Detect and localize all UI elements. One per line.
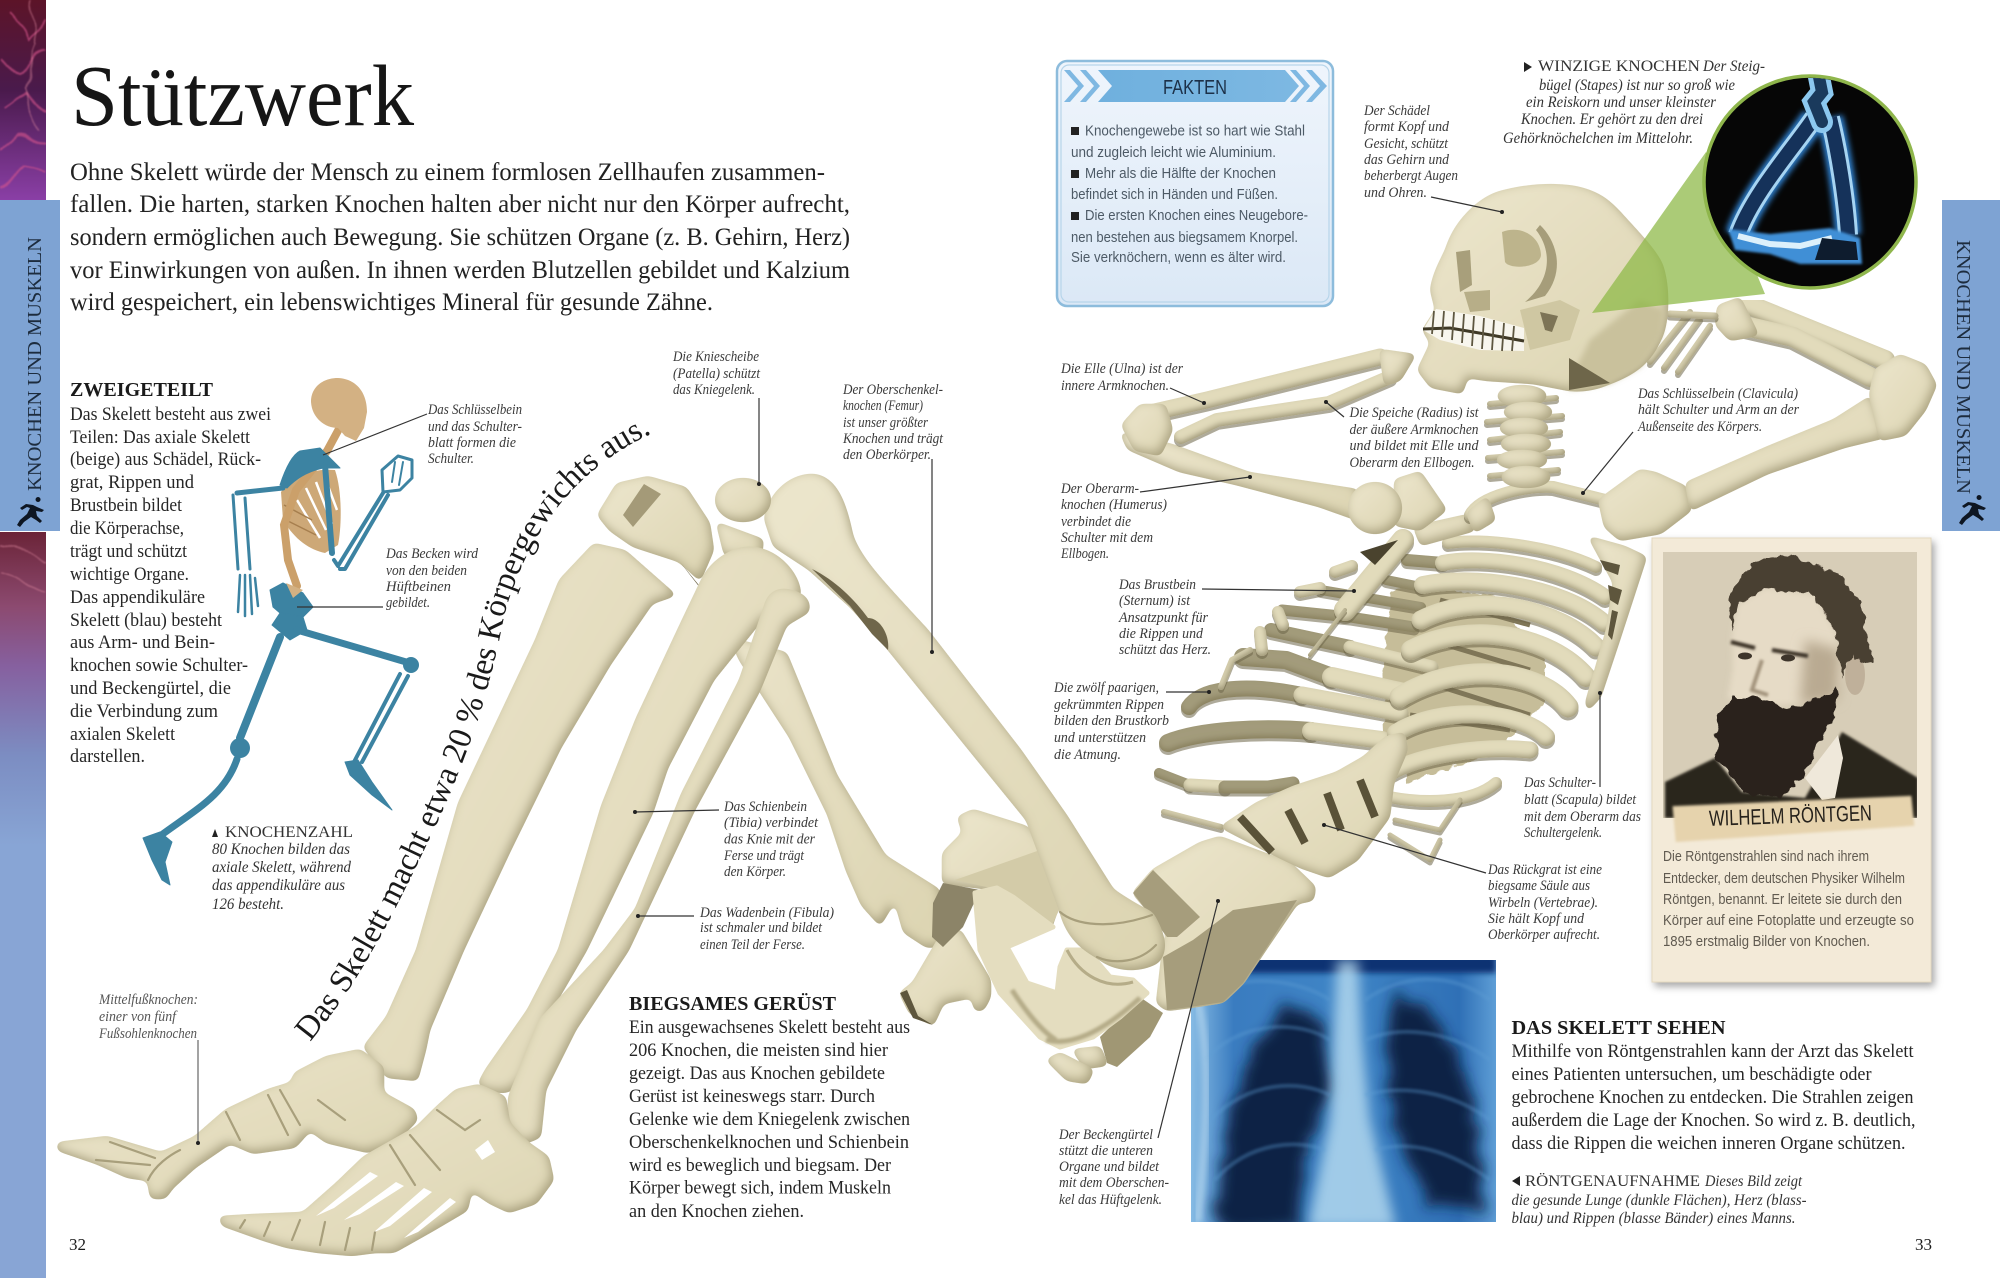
left tab label: KNOCHEN UND MUSKELN <box>24 237 46 491</box>
callout: Rippen <box>1053 680 1211 763</box>
portrait: ear <box>1845 655 1865 695</box>
callout: Schienbein: Ferse und trägt <box>723 848 805 864</box>
name label <box>1672 796 1915 842</box>
callout: Mittelfußknochen: einer von fünf <box>99 1009 178 1025</box>
illustration: running skeleton (axial beige, appendicular blue) <box>143 378 419 885</box>
callout: Beckengürtel: stützt die unteren <box>1059 1143 1153 1159</box>
panel: Wilhelm Röntgen card <box>1652 538 1931 982</box>
page number 33: 33 <box>1915 1235 1932 1254</box>
callout: Becken <box>297 546 479 611</box>
fibula <box>509 590 809 1143</box>
foot: gaps between metatarsals <box>316 1172 456 1238</box>
callout: Brustbein: Das Brustbein <box>1118 577 1196 593</box>
dark inner rib gaps <box>1405 600 1530 760</box>
rear leg <box>240 637 280 738</box>
back ribs <box>1389 541 1605 860</box>
callout: Schlüsselbein small: Schulter. <box>428 451 474 467</box>
callout: Rippen: bilden den Brustkorb <box>1054 713 1169 729</box>
callout: Elle: innere Armknochen. <box>1061 378 1169 394</box>
body: Das Skelett sehen <box>1512 1042 1916 1154</box>
sacrum <box>1133 837 1315 1010</box>
callout: Schlüsselbein large: Das Schlüsselbein (Clavicula) <box>1637 386 1798 402</box>
chest centre mass <box>1382 583 1546 782</box>
portrait: suit <box>1665 732 1918 818</box>
portrait: face <box>1728 588 1842 705</box>
body: Zweigeteilt: die Verbindung zum <box>70 702 219 722</box>
callout: Schlüsselbein small <box>323 402 522 467</box>
callout: Schienbein <box>633 799 819 880</box>
card text <box>1663 848 1914 950</box>
card text: Körper auf eine Fotoplatte und erzeugte so <box>1663 912 1914 929</box>
body: Biegsames Gerüst: Oberschenkelknochen und Schienbein <box>629 1133 909 1153</box>
cervical spine <box>1487 386 1562 487</box>
sternum <box>1260 515 1475 655</box>
callout: Kniescheibe: Die Kniescheibe <box>672 349 759 365</box>
lower pelvis wing <box>900 930 990 1025</box>
icon: runner right <box>1959 495 1986 525</box>
callout: Schlüsselbein small: und das Schulter- <box>428 419 522 435</box>
heading: Zweigeteilt: ZWEIGETEILT <box>70 379 214 401</box>
callout: Schlüsselbein small: blatt formen die <box>428 435 517 451</box>
callout: Rückgrat: biegsame Säule aus <box>1488 878 1590 894</box>
callout: Mittelfußknochen: Mittelfußknochen: <box>98 992 198 1008</box>
callout: Brustbein: schützt das Herz. <box>1119 642 1211 658</box>
callout: Oberarm: Ellbogen. <box>1060 546 1109 562</box>
callout: Schulterblatt <box>1523 691 1641 841</box>
tibia (right) <box>479 548 800 1092</box>
hip joint <box>272 613 307 640</box>
scapula <box>1586 537 1646 710</box>
facts text: Sie verknöchern, wenn es älter wird. <box>1071 249 1286 266</box>
body: Biegsames Gerüst: Ein ausgewachsenes Skelett besteht aus <box>629 1018 910 1038</box>
callout: Oberarm: verbindet die <box>1061 514 1132 530</box>
callout: Speiche: und bildet mit Elle und <box>1350 438 1479 454</box>
body: Zweigeteilt: Das Skelett besteht aus zwei <box>70 405 271 425</box>
callout: Schädel: beherbergt Augen <box>1364 168 1458 184</box>
body: Biegsames Gerüst: Körper bewegt sich, indem Muskeln <box>629 1178 891 1198</box>
callout: Speiche: Die Speiche (Radius) ist <box>1349 405 1479 421</box>
callout: Elle: Die Elle (Ulna) ist der <box>1060 361 1183 377</box>
callout: Wadenbein: ist schmaler und bildet <box>700 920 823 936</box>
callout: Rippen: Die zwölf paarigen, <box>1053 680 1159 696</box>
callout: Schlüsselbein large: Außenseite des Körpers. <box>1637 419 1762 435</box>
callout: Schlüsselbein large <box>1581 386 1799 495</box>
callout: Winzige Knochen: Der Steig- <box>1702 58 1765 75</box>
section: Biegsames Gerüst <box>629 992 910 1222</box>
pelvis <box>270 583 313 617</box>
callout: Speiche: der äußere Armknochen <box>1350 422 1478 438</box>
callout: Schienbein: Das Schienbein <box>723 799 807 815</box>
blue shoulder <box>280 448 340 488</box>
pubis and ischium <box>975 888 1147 1047</box>
callout: Oberarm: Schulter mit dem <box>1061 530 1153 546</box>
portrait <box>1663 552 1918 818</box>
callout: Rippen: die Atmung. <box>1054 747 1121 763</box>
body: Zweigeteilt: Brustbein bildet <box>70 496 183 516</box>
title: Stützwerk <box>71 47 414 144</box>
left shoulder joint and humerus <box>1121 433 1446 533</box>
callout: Rückgrat: Sie hält Kopf und <box>1488 911 1585 927</box>
callout: Oberschenkelknochen: Der Oberschenkel- <box>842 382 943 398</box>
portrait: hair <box>1727 555 1872 678</box>
front arm <box>325 465 332 553</box>
callout: Beckengürtel: Organe und bildet <box>1059 1159 1160 1175</box>
section: Das Skelett sehen <box>1512 1017 1916 1154</box>
facts text: Die ersten Knochen eines Neugebore- <box>1085 207 1308 224</box>
cheek shade <box>1520 300 1580 350</box>
body: Zweigeteilt: aus Arm- und Bein- <box>70 633 215 653</box>
callout: Rückgrat: Oberkörper aufrecht. <box>1488 927 1600 943</box>
facts text: nen bestehen aus biegsamem Knorpel. <box>1071 229 1298 246</box>
skeleton: main illustration <box>58 185 1936 1255</box>
right tab label: KNOCHEN UND MUSKELN <box>1952 240 1974 494</box>
callout: Schlüsselbein large: hält Schulter und Arm an der <box>1638 402 1799 418</box>
callout: Schädel: Gesicht, schützt <box>1364 136 1449 152</box>
callout: Beckengürtel: Der Beckengürtel <box>1058 1127 1153 1143</box>
facts ribbon <box>1064 70 1327 102</box>
right forearm <box>1732 302 1885 377</box>
callout: Becken: Das Becken wird <box>385 546 479 562</box>
card text: Die Röntgenstrahlen sind nach ihrem <box>1663 848 1869 865</box>
facts ribbon: FAKTEN <box>1163 77 1227 99</box>
callout: Röntgenaufnahme <box>1512 1173 1806 1227</box>
stapes inset: black circle <box>1704 72 1916 288</box>
orbits <box>1502 230 1541 267</box>
body: Das Skelett sehen: gebrochene Knochen zu entdecken. Die Strahlen zeigen <box>1512 1088 1914 1108</box>
callout: Rückgrat: Wirbeln (Vertebrae). <box>1488 895 1598 911</box>
left section tab <box>0 200 60 531</box>
callout: Oberschenkelknochen <box>842 382 944 654</box>
callout: Brustbein: (Sternum) ist <box>1119 593 1191 609</box>
intro text block <box>70 159 851 316</box>
lumbar spine <box>1221 733 1407 877</box>
x-ray: spine and heart <box>1308 960 1396 1228</box>
left page edge strip <box>0 0 46 1278</box>
callout: Schulterblatt: Schultergelenk. <box>1524 825 1602 841</box>
right elbow <box>1870 355 1936 440</box>
card text: Entdecker, dem deutschen Physiker Wilhelm <box>1663 870 1905 887</box>
facts text: Mehr als die Hälfte der Knochen <box>1085 165 1276 182</box>
femur (front leg) <box>765 475 1164 969</box>
stapes bone glow <box>1738 118 1848 235</box>
x-ray: right lung <box>1384 995 1484 1212</box>
callout: Kniescheibe: (Patella) schützt <box>673 366 761 382</box>
x-ray image <box>1191 955 1496 1228</box>
callout: Rückgrat <box>1322 823 1603 943</box>
card text: Röntgen, benannt. Er leitete sie durch den <box>1663 891 1902 908</box>
right shoulder <box>1599 470 1691 540</box>
callout: Knochenzahl: axiale Skelett, während <box>212 859 351 876</box>
callout: Speiche <box>1324 400 1479 471</box>
body: Biegsames Gerüst: gezeigt. Das aus Knochen gebildete <box>629 1064 885 1084</box>
body: Das Skelett sehen: dass die Rippen die weichen inneren Organe schützen. <box>1512 1134 1906 1154</box>
intro text block: fallen. Die harten, starken Knochen halten aber nicht nur den Körper aufrecht, <box>70 191 850 218</box>
callout: Oberarm: knochen (Humerus) <box>1061 497 1167 513</box>
callout: Oberarm <box>1060 475 1252 562</box>
dark pelvic notch <box>932 883 980 947</box>
body: Biegsames Gerüst <box>629 1018 910 1222</box>
callout: Elle <box>1060 361 1206 405</box>
callout: Knochenzahl: 126 besteht. <box>212 896 284 913</box>
callout: Knochenzahl: KNOCHENZAHL <box>225 824 353 841</box>
body: Das Skelett sehen: eines Patienten untersuchen, um beschädigte oder <box>1512 1065 1872 1085</box>
callout: Speiche: Oberarm den Ellbogen. <box>1350 455 1474 471</box>
body: Das Skelett sehen: Mithilfe von Röntgenstrahlen kann der Arzt das Skelett <box>1512 1042 1914 1062</box>
intro text block: vor Einwirkungen von außen. In ihnen werden Blutzellen gebildet und Kalzium <box>70 257 851 284</box>
callout: Schienbein: das Knie mit der <box>724 832 815 848</box>
callout: Wadenbein <box>636 905 834 953</box>
coccyx and lower bones <box>1100 997 1163 1067</box>
stapes inset: green magnifier cone <box>1592 152 1765 313</box>
callout: Brustbein <box>1118 577 1356 658</box>
callout: Schädel <box>1363 103 1504 214</box>
facts text <box>1071 122 1308 266</box>
body: Zweigeteilt: die Körperachse, <box>70 519 184 539</box>
section: Zweigeteilt <box>70 379 271 767</box>
callout: Winzige Knochen: ein Reiskorn und unser kleinster <box>1526 94 1717 111</box>
callout: Oberschenkelknochen: Knochen und trägt <box>842 431 944 447</box>
callout: Schulterblatt: blatt (Scapula) bildet <box>1524 792 1637 808</box>
foot (left) <box>58 1050 417 1198</box>
right section tab <box>1942 200 2000 531</box>
body: Das Skelett sehen: außerdem die Lage der Knochen. So wird z. B. deutlich, <box>1512 1111 1916 1131</box>
body: Zweigeteilt: Skelett (blau) besteht <box>70 611 223 631</box>
right humerus <box>1686 397 1885 510</box>
callout: Knochenzahl <box>212 824 353 913</box>
facts text: befindet sich in Händen und Füßen. <box>1071 186 1278 203</box>
hand behind head <box>1650 298 1758 372</box>
body: Zweigeteilt: grat, Rippen und <box>70 473 195 493</box>
body: Zweigeteilt: darstellen. <box>70 747 145 767</box>
callout: Schienbein: den Körper. <box>724 864 786 880</box>
callout: Röntgenaufnahme: die gesunde Lunge (dunkle Flächen), Herz (blass- <box>1512 1192 1806 1209</box>
body: Biegsames Gerüst: Gelenke wie dem Kniegelenk zwischen <box>629 1110 910 1130</box>
callout: Becken: von den beiden <box>386 563 467 579</box>
intro text block: Ohne Skelett würde der Mensch zu einem formlosen Zellhaufen zusammen- <box>70 159 825 186</box>
body: Zweigeteilt: Das appendikuläre <box>70 588 205 608</box>
page number 32: 32 <box>69 1235 86 1254</box>
heading: Biegsames Gerüst: BIEGSAMES GERÜST <box>629 992 837 1015</box>
body: Zweigeteilt: trägt und schützt <box>70 542 188 562</box>
femur shadow <box>812 569 888 650</box>
patella <box>716 479 770 560</box>
callout: Winzige Knochen: Gehörknöchelchen im Mittelohr. <box>1503 130 1693 147</box>
callout: Oberschenkelknochen: knochen (Femur) <box>843 398 923 414</box>
callout: Schädel: und Ohren. <box>1364 185 1427 201</box>
callout: Winzige Knochen: WINZIGE KNOCHEN <box>1538 58 1700 75</box>
teeth <box>1423 309 1524 351</box>
body: Biegsames Gerüst: wird es beweglich und biegsam. Der <box>629 1156 891 1176</box>
left forearm <box>1122 350 1415 455</box>
body: Zweigeteilt: und Beckengürtel, die <box>70 679 231 699</box>
body: Zweigeteilt <box>70 405 271 767</box>
callout: Schädel: Der Schädel <box>1363 103 1430 119</box>
card text: 1895 erstmalig Bilder von Knochen. <box>1663 933 1870 950</box>
facts text: Knochengewebe ist so hart wie Stahl <box>1085 122 1305 140</box>
callout: Rippen: gekrümmten Rippen <box>1054 697 1164 713</box>
intro text block: sondern ermöglichen auch Bewegung. Sie schützen Organe (z. B. Gehirn, Herz) <box>70 224 850 251</box>
callout: Schlüsselbein small: Das Schlüsselbein <box>427 402 522 418</box>
body: Biegsames Gerüst: Gerüst ist keineswegs starr. Durch <box>629 1087 875 1107</box>
callout: Winzige Knochen: Knochen. Er gehört zu den drei <box>1520 111 1703 128</box>
body: Zweigeteilt: axialen Skelett <box>70 725 176 745</box>
icon: runner left <box>17 497 44 527</box>
callout: Becken: Hüftbeinen <box>385 579 451 595</box>
facts box <box>1057 61 1333 306</box>
callout: Oberarm: Der Oberarm- <box>1060 481 1139 497</box>
skull <box>311 378 367 441</box>
name label: WILHELM RÖNTGEN <box>1709 800 1872 831</box>
callout: Mittelfußknochen <box>98 992 200 1145</box>
callout: Beckengürtel <box>1058 899 1220 1208</box>
portrait: beard <box>1715 688 1838 798</box>
callout: Wadenbein: einen Teil der Ferse. <box>700 937 805 953</box>
x-ray: left lung <box>1218 1005 1332 1228</box>
callout: Rückgrat: Das Rückgrat ist eine <box>1487 862 1603 878</box>
callout: Rippen: und unterstützen <box>1054 730 1146 746</box>
portrait: collar <box>1805 735 1843 800</box>
callout: Röntgenaufnahme: RÖNTGENAUFNAHME <box>1525 1173 1700 1190</box>
callout: Oberschenkelknochen: ist unser größter <box>843 415 928 431</box>
callout: Brustbein: die Rippen und <box>1119 626 1204 642</box>
callout: Schädel: formt Kopf und <box>1364 119 1450 135</box>
spine <box>284 427 340 586</box>
sacrum shading <box>1133 870 1297 1010</box>
femur (rear leg) <box>700 570 945 947</box>
callout: Kniescheibe <box>672 349 761 486</box>
intro text block: wird gespeichert, ein lebenswichtiges Mineral für gesunde Zähne. <box>70 289 713 316</box>
tibia (left) <box>364 544 675 1080</box>
clavicle <box>1470 487 1605 515</box>
back of skull shade <box>1569 300 1664 390</box>
callout: Brustbein: Ansatzpunkt für <box>1118 610 1208 626</box>
body: Biegsames Gerüst: 206 Knochen, die meisten sind hier <box>629 1041 888 1061</box>
callout: Oberschenkelknochen: den Oberkörper. <box>843 447 931 463</box>
rear arm <box>237 488 283 493</box>
callout: Becken: gebildet. <box>386 595 430 611</box>
body: Zweigeteilt: Teilen: Das axiale Skelett <box>70 428 251 448</box>
callout: Winzige Knochen <box>1503 58 1765 147</box>
callout: Schulterblatt: mit dem Oberarm das <box>1524 809 1641 825</box>
front leg <box>297 630 413 664</box>
heading: Das Skelett sehen: DAS SKELETT SEHEN <box>1512 1017 1726 1039</box>
callout: Knochenzahl: das appendikuläre aus <box>212 877 345 894</box>
curved statement text: Das Skelett macht etwa 20 % des Körpergewichts aus. <box>294 424 650 1042</box>
foot (right) <box>220 1085 553 1255</box>
callout: Beckengürtel: mit dem Oberschen- <box>1059 1175 1169 1191</box>
callout: Mittelfußknochen: Fußsohlenknochen <box>98 1026 197 1042</box>
callout: Kniescheibe: das Kniegelenk. <box>673 382 755 398</box>
skull <box>1418 185 1667 393</box>
body: Biegsames Gerüst: an den Knochen ziehen. <box>629 1202 804 1222</box>
callout: Röntgenaufnahme: blau) und Rippen (blasse Bänder) eines Manns. <box>1512 1210 1796 1227</box>
body: Zweigeteilt: wichtige Organe. <box>70 565 189 585</box>
portrait: eyes and brows <box>1731 642 1808 656</box>
front ribs <box>1159 560 1443 827</box>
callout: Schulterblatt: Das Schulter- <box>1523 775 1596 791</box>
callout: Röntgenaufnahme: Dieses Bild zeigt <box>1704 1173 1803 1190</box>
knee: rear femur condyles <box>598 477 713 580</box>
callout: Schienbein: (Tibia) verbindet <box>724 815 819 831</box>
rib cage <box>281 470 341 553</box>
body: Zweigeteilt: (beige) aus Schädel, Rück- <box>70 450 261 470</box>
callout: Knochenzahl: 80 Knochen bilden das <box>212 841 350 858</box>
ilium wing <box>943 810 1073 930</box>
callout: Beckengürtel: kel das Hüftgelenk. <box>1059 1192 1162 1208</box>
callout: Schädel: das Gehirn und <box>1364 152 1450 168</box>
callout: Winzige Knochen: bügel (Stapes) ist nur so groß wie <box>1539 77 1735 94</box>
body: Zweigeteilt: knochen sowie Schulter- <box>70 656 248 676</box>
facts text: und zugleich leicht wie Aluminium. <box>1071 144 1276 161</box>
callout: Wadenbein: Das Wadenbein (Fibula) <box>699 905 834 921</box>
